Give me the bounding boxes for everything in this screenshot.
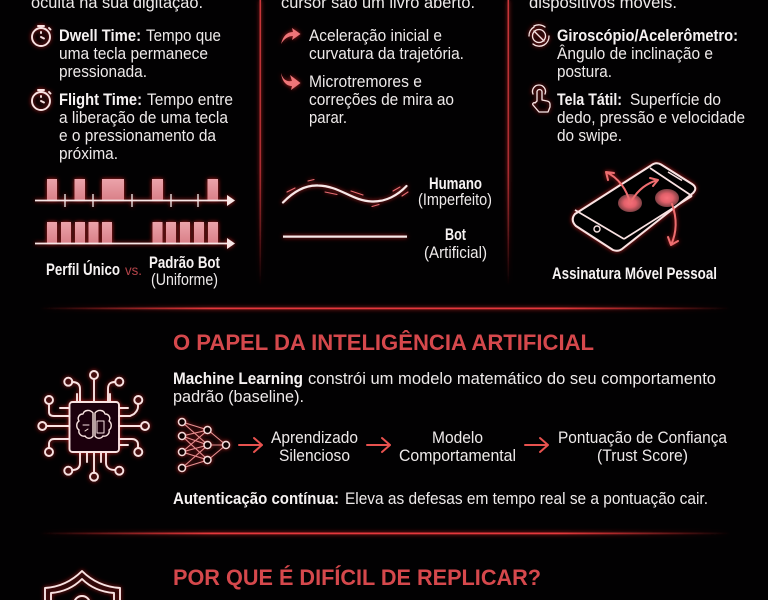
text: behavioral model bbox=[399, 428, 516, 465]
text: flight time: Flight Time: bbox=[59, 90, 142, 109]
text: dwell time: Dwell Time: bbox=[59, 26, 141, 45]
panel: why hard to replicate bbox=[45, 565, 541, 600]
text: dwell time: uma tecla permanece bbox=[59, 44, 208, 63]
text: flight time: próxima. bbox=[59, 144, 118, 163]
label: human bbox=[418, 174, 492, 209]
text: touch screen bbox=[557, 90, 745, 145]
text: silent learning bbox=[271, 428, 358, 465]
heading: why is it hard: POR QUE É DIFÍCIL DE REPLICAR? bbox=[173, 565, 541, 590]
chart: human trajectory bbox=[283, 180, 408, 206]
text: microtremors: parar. bbox=[309, 108, 347, 127]
text: acceleration bbox=[309, 26, 464, 63]
icon: curved arrow down bbox=[281, 73, 300, 90]
arrow: to trust score bbox=[525, 438, 548, 452]
text: flight time: e o pressionamento da bbox=[59, 126, 216, 145]
label: human: Humano bbox=[429, 174, 482, 193]
icon: touch finger bbox=[532, 85, 550, 112]
arrow: to silent learning bbox=[239, 438, 262, 452]
text: gyroscope: Ângulo de inclinação e bbox=[557, 44, 713, 63]
icon: gyroscope bbox=[529, 25, 549, 46]
chart labels: profile vs bot: vs. bbox=[125, 262, 142, 278]
text: behavioral model: Comportamental bbox=[399, 446, 516, 465]
text: flight time bbox=[59, 90, 233, 163]
text: continuous authentication: Autenticação contínua: bbox=[173, 489, 339, 508]
chart labels: profile vs bot: Padrão Bot bbox=[149, 253, 220, 272]
text: machine learning: padrão (baseline). bbox=[173, 387, 304, 406]
panel: mobile sensors bbox=[529, 0, 745, 283]
label: human: (Imperfeito) bbox=[418, 190, 492, 209]
text: microtremors bbox=[309, 72, 454, 127]
caption: personal mobile signature: Assinatura Móvel Pessoal bbox=[552, 264, 717, 283]
text: behavioral model: Modelo bbox=[432, 428, 483, 447]
panel: artificial intelligence bbox=[38, 330, 727, 508]
text: flight time: Tempo entre bbox=[147, 90, 233, 109]
text: microtremors: correções de mira ao bbox=[309, 90, 454, 109]
text: dwell time bbox=[59, 26, 221, 81]
text: acceleration: curvatura da trajetória. bbox=[309, 44, 464, 63]
label: bot: Bot bbox=[445, 225, 466, 244]
column dividers bbox=[260, 0, 509, 285]
text: machine learning: Machine Learning bbox=[173, 369, 303, 388]
text: dwell time: Tempo que bbox=[146, 26, 221, 45]
text: touch screen: Superfície do bbox=[630, 90, 721, 109]
text: gyroscope: Giroscópio/Acelerômetro: bbox=[557, 26, 738, 45]
chart: bot trajectory bbox=[283, 236, 407, 238]
chart labels: profile vs bot bbox=[46, 253, 220, 289]
text: trust score: (Trust Score) bbox=[597, 446, 688, 465]
text: silent learning: Aprendizado bbox=[271, 428, 358, 447]
illustration: phone with gestures bbox=[573, 163, 695, 251]
icon: AI brain chip bbox=[38, 371, 149, 481]
icon: stopwatch flight bbox=[32, 90, 50, 110]
text: microtremors: Microtremores e bbox=[309, 72, 422, 91]
chart: unique typing rhythm bbox=[35, 179, 235, 207]
heading: the role of AI: O PAPEL DA INTELIGÊNCIA ARTIFICIAL bbox=[173, 330, 594, 355]
divider bottom bbox=[40, 532, 730, 534]
text: trust score: Pontuação de Confiança bbox=[558, 428, 727, 447]
label: bot: (Artificial) bbox=[424, 243, 487, 262]
text: acceleration: Aceleração inicial e bbox=[309, 26, 442, 45]
text: dwell time: pressionada. bbox=[59, 62, 147, 81]
panel: keystroke dynamics bbox=[31, 0, 235, 289]
divider top bbox=[40, 308, 730, 309]
text: trust score bbox=[558, 428, 727, 465]
text: touch screen: Tela Tátil: bbox=[557, 90, 622, 109]
label: bot bbox=[424, 225, 487, 262]
icon: shield bbox=[45, 571, 120, 600]
icon: curved arrow up bbox=[281, 28, 300, 44]
text: silent learning: Silencioso bbox=[279, 446, 350, 465]
text: gyroscope bbox=[557, 26, 738, 81]
text: machine learning: constrói um modelo matemático do seu comportamento bbox=[308, 369, 716, 388]
icon: neural network bbox=[178, 418, 230, 472]
text: flight time: a liberação de uma tecla bbox=[59, 108, 228, 127]
panel: mouse dynamics bbox=[281, 0, 492, 262]
text: machine learning bbox=[173, 369, 716, 406]
chart labels: profile vs bot: (Uniforme) bbox=[151, 270, 218, 289]
text: continuous authentication bbox=[173, 489, 708, 508]
text: continuous authentication: Eleva as defesas em tempo real se a pontuação cair. bbox=[345, 489, 708, 508]
text: touch screen: dedo, pressão e velocidade bbox=[557, 108, 745, 127]
chart: uniform bot rhythm bbox=[35, 222, 235, 249]
text: touch screen: do swipe. bbox=[557, 126, 622, 145]
chart labels: profile vs bot: Perfil Único bbox=[46, 260, 120, 279]
text: gyroscope: postura. bbox=[557, 62, 612, 81]
icon: stopwatch dwell bbox=[32, 26, 50, 46]
arrow: to behavioral model bbox=[367, 438, 390, 452]
